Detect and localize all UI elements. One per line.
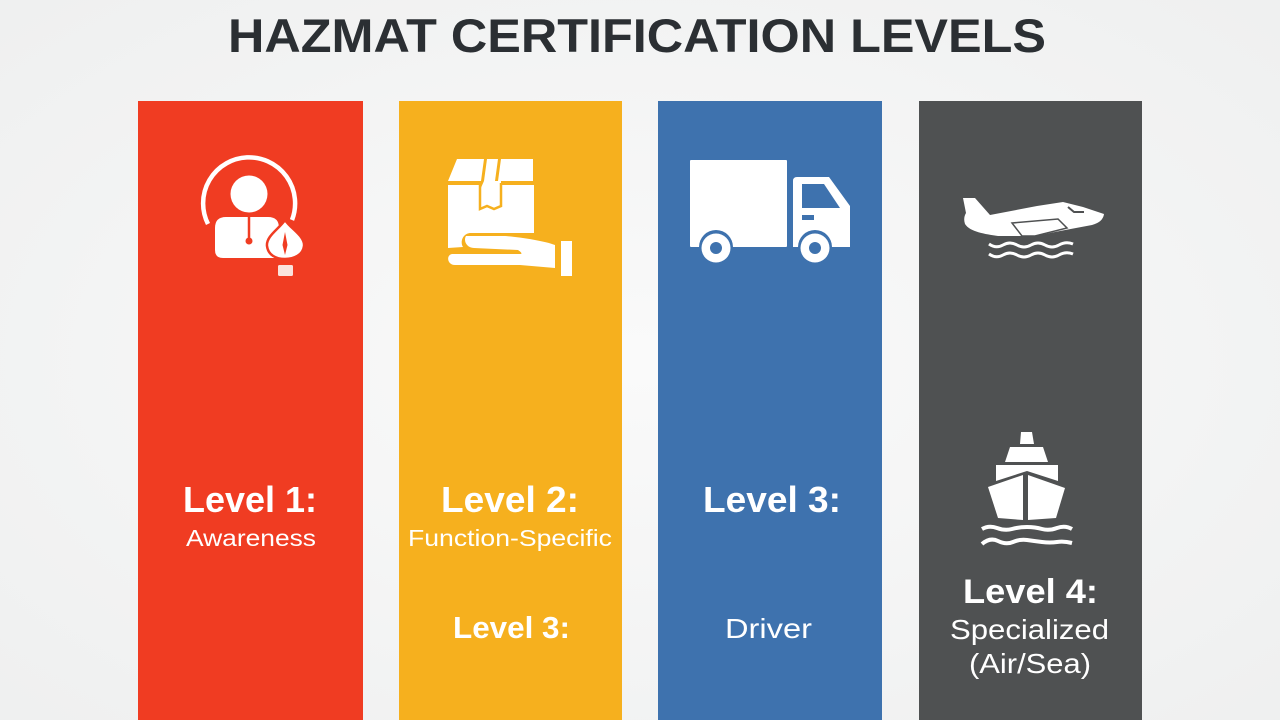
title: HAZMAT CERTIFICATION LEVELS (228, 9, 1046, 62)
icon: airplane over water (963, 198, 1104, 257)
icon: package on hand (448, 159, 572, 276)
label: awareness: Awareness (186, 525, 316, 551)
heading: level 4: Level 4: (963, 573, 1098, 611)
panel: level 1 awareness (138, 101, 363, 720)
heading: level 3 on yellow: Level 3: (453, 610, 570, 645)
heading: level 3: Level 3: (703, 479, 841, 520)
icon: ship (982, 432, 1072, 544)
heading: level 1: Level 1: (183, 479, 317, 520)
label: specialized: Specialized (950, 614, 1109, 645)
panel: level 4 specialized (919, 101, 1142, 720)
panel: level 2 function-specific (399, 101, 622, 720)
icon: delivery truck (690, 160, 850, 264)
label: driver: Driver (725, 613, 812, 644)
heading: level 2: Level 2: (441, 479, 579, 520)
panel: level 3 driver (658, 101, 882, 720)
icon: person with hazard alert (203, 157, 304, 276)
label: function-specific: Function-Specific (408, 525, 612, 551)
label: air and sea: (Air/Sea) (969, 648, 1091, 679)
